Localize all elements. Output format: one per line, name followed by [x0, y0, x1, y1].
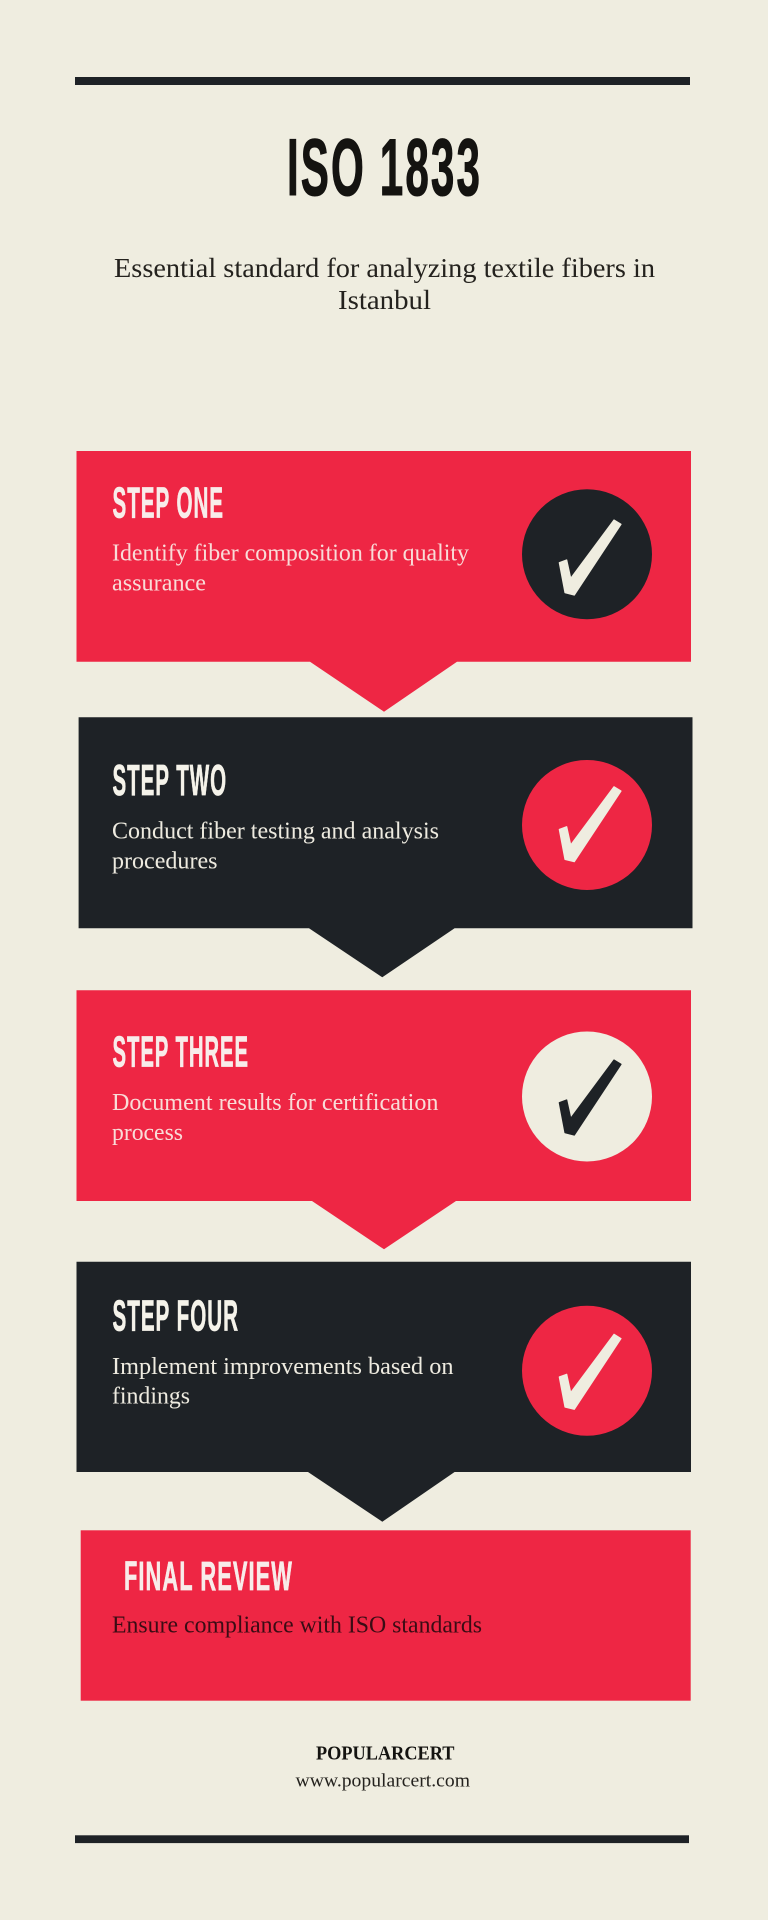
panel: final review	[81, 1530, 691, 1701]
website: www.popularcert.com	[296, 1771, 470, 1792]
step three description: process	[112, 1120, 183, 1146]
icon: check circle four	[522, 1306, 652, 1436]
step four description: Implement improvements based on	[112, 1354, 454, 1380]
subtitle: Essential standard for analyzing textile fibers in	[114, 253, 656, 283]
step two box with arrow	[79, 717, 693, 977]
step one box with arrow	[76, 451, 691, 712]
step two description	[112, 818, 439, 874]
panel: step three	[76, 990, 691, 1249]
icon: check circle two	[522, 760, 652, 890]
step four description	[112, 1354, 454, 1409]
icon: check circle one	[522, 489, 652, 619]
panel: step three: STEP THREE	[112, 1029, 249, 1077]
step three description: Document results for certification	[112, 1090, 438, 1116]
step one description	[112, 541, 469, 597]
final review heading: FINAL REVIEW	[124, 1553, 293, 1599]
step one description: Identify fiber composition for quality	[112, 541, 469, 567]
title: ISO 1833	[287, 123, 482, 213]
subtitle	[114, 253, 656, 315]
step two description: procedures	[112, 848, 218, 874]
step four description: findings	[112, 1383, 190, 1409]
step one description: assurance	[112, 571, 206, 597]
step two description: Conduct fiber testing and analysis	[112, 818, 439, 844]
final review description: Ensure compliance with ISO standards	[112, 1612, 482, 1638]
subtitle: Istanbul	[338, 285, 431, 315]
panel: step two	[79, 717, 693, 977]
step four box with arrow	[76, 1262, 691, 1522]
brand name: POPULARCERT	[316, 1742, 455, 1764]
panel: step one	[76, 451, 691, 712]
step three box with arrow	[76, 990, 691, 1249]
bottom rule	[75, 1835, 689, 1843]
final review box	[81, 1530, 691, 1701]
panel: step four: STEP FOUR	[112, 1293, 239, 1341]
icon: check circle three	[522, 1032, 652, 1162]
panel: step two: STEP TWO	[112, 757, 227, 805]
panel: step four	[76, 1262, 691, 1522]
step three description	[112, 1090, 438, 1146]
panel: step one: STEP ONE	[112, 480, 224, 528]
top rule	[75, 77, 690, 85]
